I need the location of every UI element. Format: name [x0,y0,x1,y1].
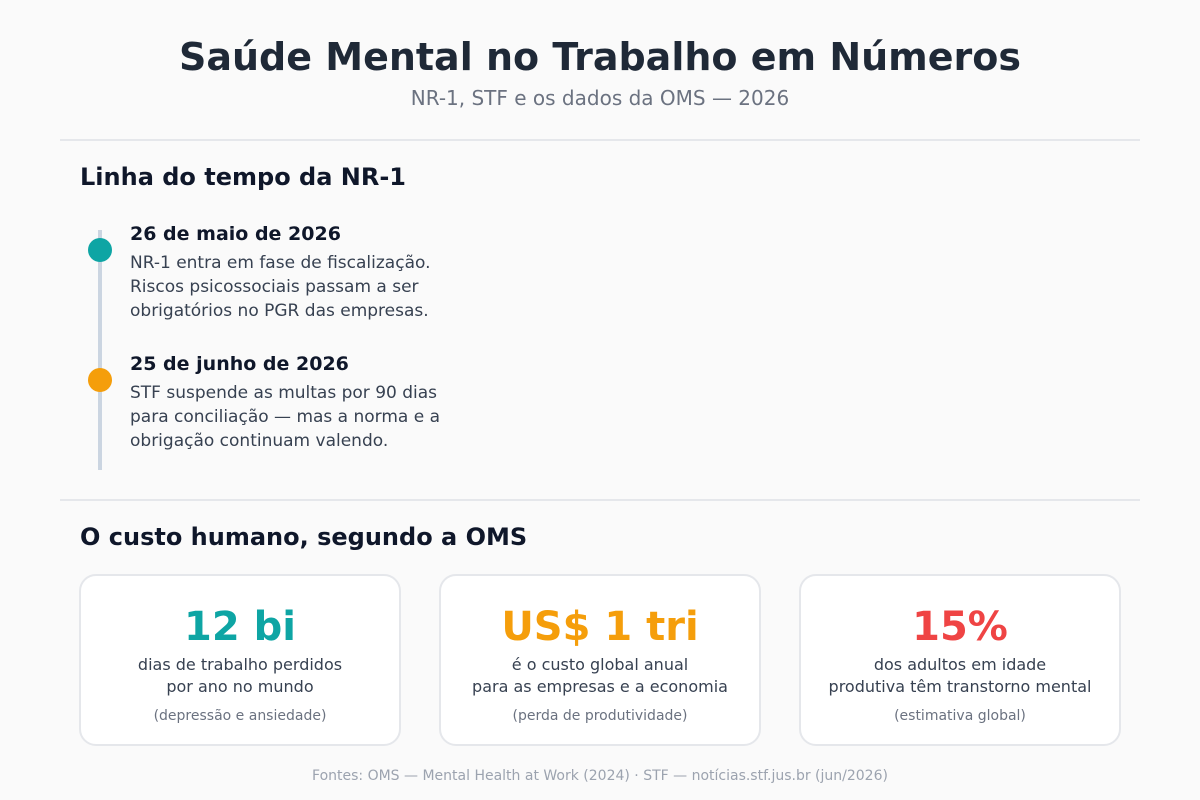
card: 15%: produtiva têm transtorno mental [829,677,1091,696]
subtitle: NR-1, STF e os dados da OMS — 2026 [411,86,789,110]
timeline [88,223,440,470]
card: 15%: (estimativa global) [894,708,1026,724]
card: 12 bi: 12 bi [184,604,296,650]
marker: 25 de junho [88,368,112,392]
card: 15%: 15% [912,604,1008,650]
event: 25 de junho de 2026: para conciliação — mas a norma e a [130,407,440,427]
event: 26 de maio de 2026: Riscos psicossociais passam a ser [130,277,419,297]
card: 12 bi: (depressão e ansiedade) [154,708,326,724]
card: US$ 1 tri: US$ 1 tri [501,604,699,650]
event: 25 de junho de 2026: STF suspende as multas por 90 dias [130,383,437,403]
card: 15%: dos adultos em idade [874,655,1046,674]
card: US$ 1 tri: é o custo global anual [512,655,688,674]
card: 15% [800,575,1120,745]
heading: timeline: Linha do tempo da NR-1 [80,163,406,191]
event: 25 de junho de 2026 [130,353,440,451]
event: 25 de junho de 2026: 25 de junho de 2026 [130,353,349,375]
timeline axis [98,230,102,470]
event: 25 de junho de 2026: obrigação continuam valendo. [130,431,388,451]
card: 12 bi [80,575,400,745]
footer sources: Fontes: OMS — Mental Health at Work (2024) · STF — notícias.stf.jus.br (jun/2026) [312,768,888,784]
card: US$ 1 tri: para as empresas e a economia [472,677,728,696]
card: 12 bi: dias de trabalho perdidos [138,655,342,674]
event: 26 de maio de 2026: NR-1 entra em fase de fiscalização. [130,253,430,273]
card: 12 bi: por ano no mundo [166,677,314,696]
marker: 26 de maio [88,238,112,262]
card: US$ 1 tri: (perda de produtividade) [513,708,687,724]
event: 26 de maio de 2026: obrigatórios no PGR das empresas. [130,301,429,321]
title: Saúde Mental no Trabalho em Números [179,35,1021,79]
event: 26 de maio de 2026: 26 de maio de 2026 [130,223,341,245]
card: US$ 1 tri [440,575,760,745]
heading: human cost: O custo humano, segundo a OMS [80,523,527,551]
event: 26 de maio de 2026 [130,223,430,321]
